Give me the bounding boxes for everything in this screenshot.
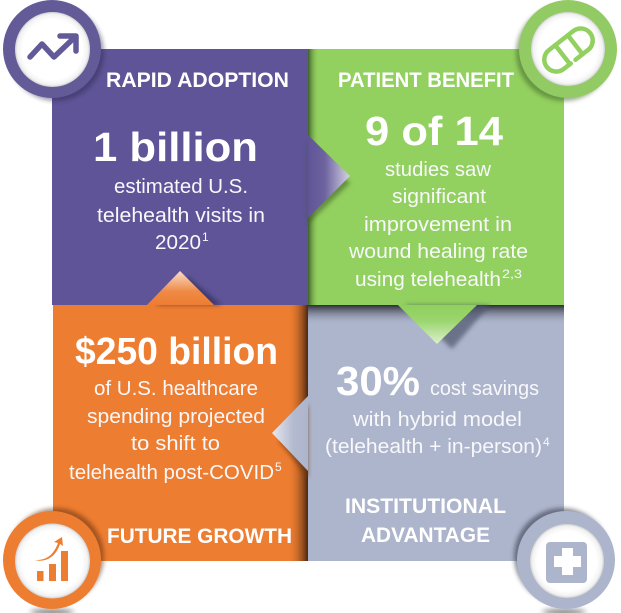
panel: institutional advantage: [308, 305, 564, 561]
text: future growth body: spending projected: [87, 406, 265, 428]
arrow: orange into purple: [147, 271, 222, 305]
heading: institutional advantage: [345, 495, 506, 547]
heading: future growth: FUTURE GROWTH: [107, 525, 292, 548]
panel: patient benefit: [308, 49, 564, 305]
text: future growth body: of U.S. healthcare: [94, 378, 258, 400]
text: patient benefit body: significant: [392, 186, 486, 208]
arrow: green into slate: [398, 305, 490, 349]
text: future growth body: telehealth post-COVID: [69, 462, 274, 484]
text: patient benefit body: using telehealth: [355, 269, 501, 291]
text: future growth body: [69, 378, 282, 484]
heading: institutional advantage: INSTITUTIONAL: [345, 495, 506, 518]
text: future growth body: 5: [275, 460, 282, 474]
text: patient benefit body: improvement in: [364, 214, 512, 236]
arrow: purple into green: [308, 135, 350, 224]
stat: 30% cost savings: 30%: [336, 358, 420, 404]
icon: trend arrow badge: [3, 0, 104, 101]
text: patient benefit body: [348, 159, 528, 291]
text: institutional advantage body: [325, 409, 550, 458]
icon: pill badge: [516, 0, 617, 101]
heading: rapid adoption: RAPID ADOPTION: [106, 69, 289, 92]
text: rapid adoption body: [97, 176, 265, 254]
text: institutional advantage body: 4: [543, 435, 550, 449]
arrow: slate into orange: [272, 396, 308, 478]
stat: 1 billion: 1 billion: [93, 124, 258, 170]
text: patient benefit body: studies saw: [385, 159, 492, 181]
text: institutional advantage body: with hybrid model: [352, 409, 522, 431]
stat: 30% cost savings: cost savings: [430, 378, 539, 400]
icon: growth chart badge: [3, 508, 104, 613]
panel: future growth: [53, 305, 308, 561]
text: future growth body: to shift to: [131, 433, 220, 455]
icon: medical cross badge: [514, 508, 615, 613]
text: patient benefit body: wound healing rate: [348, 241, 528, 263]
heading: institutional advantage: ADVANTAGE: [361, 524, 490, 547]
stat: $250 billion: $250 billion: [75, 331, 278, 373]
panel: rapid adoption: [52, 49, 308, 305]
text: rapid adoption body: estimated U.S.: [114, 176, 248, 198]
text: rapid adoption body: 1: [202, 230, 209, 244]
text: rapid adoption body: 2020: [155, 232, 201, 254]
stat: 9 of 14: 9 of 14: [365, 108, 503, 154]
text: rapid adoption body: telehealth visits in: [97, 205, 265, 227]
heading: patient benefit: PATIENT BENEFIT: [338, 69, 514, 92]
stat: 30% cost savings: [336, 358, 539, 404]
text: institutional advantage body: (telehealth + in-person): [325, 436, 542, 458]
text: patient benefit body: 2,3: [502, 267, 522, 281]
